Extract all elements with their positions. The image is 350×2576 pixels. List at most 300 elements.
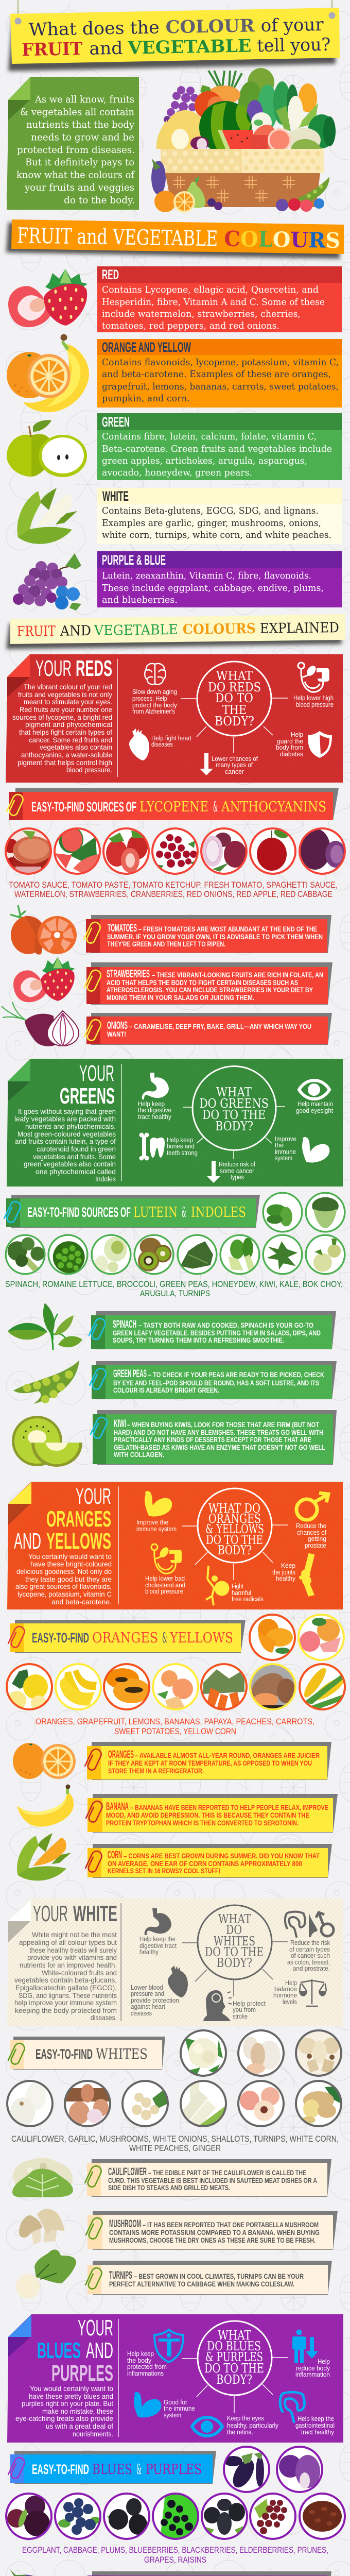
panel: red: include watermelon, strawberries, cherries, bbox=[102, 309, 301, 319]
caption: lower blood pressure: blood pressure bbox=[296, 701, 334, 708]
banner: sources of lycopene and anthocyanins: LYCOPENE bbox=[139, 799, 208, 815]
caption: gastrointestinal: Help keep the bbox=[297, 2415, 334, 2422]
panel: purple and blue: These include eggplant, cabbage, endive, plums, bbox=[102, 583, 324, 594]
circle: what do blues and purples do to the body: BODY? bbox=[216, 2372, 252, 2387]
banner: easy to find blues and purples: BLUES bbox=[92, 2462, 132, 2478]
text: blues description: have these pretty blues and bbox=[29, 2392, 113, 2400]
text: greens description: leafy vegetables are packed with bbox=[14, 1115, 116, 1123]
photo: cranberries bbox=[152, 828, 198, 874]
caption: blood pressure and heart: pressure and bbox=[131, 1990, 164, 1997]
circle: what do whites do to the body: BODY? bbox=[217, 1956, 252, 1970]
circle: what do oranges and yellows do to the body: ORANGES bbox=[208, 1512, 261, 1526]
icon: stomach bbox=[142, 1073, 169, 1099]
panel: intro note: protected from diseases. bbox=[17, 144, 135, 156]
caption: eyesight: good eyesight bbox=[296, 1107, 333, 1114]
text: whites description: help improve your immune system bbox=[14, 1998, 117, 2007]
caption: cancer risk: Reduce risk of bbox=[219, 1160, 255, 1168]
caption: lower blood pressure: Help lower high bbox=[293, 694, 334, 702]
caption: cholesterol bbox=[145, 1574, 185, 1595]
photo: spinach bbox=[263, 1193, 302, 1232]
caption: bones and teeth: bones and bbox=[167, 1142, 195, 1150]
note: mushroom bbox=[85, 2211, 338, 2250]
caption: stroke bbox=[233, 1999, 266, 2020]
banner: colours explained: FRUIT bbox=[17, 623, 56, 640]
note: strawberries: ACID THAT HELPS THE BODY TO FIGHT CERTAIN DISEASES SUCH AS bbox=[107, 978, 298, 987]
banner: sources of lutein and indoles: EASY-TO-FIND SOURCES OF bbox=[27, 1205, 131, 1220]
icon: kiwi bbox=[12, 1416, 82, 1467]
text: oranges description bbox=[15, 1552, 112, 1606]
caption: prostate: chances of bbox=[297, 1529, 326, 1536]
text: greens description: nutrients and phytochemicals. bbox=[25, 1122, 116, 1130]
caption: stroke: stroke bbox=[233, 2012, 248, 2020]
panel: intro note: know what the colours of bbox=[16, 170, 135, 181]
photo: cauliflower bbox=[181, 2030, 226, 2076]
banner: colours explained bbox=[6, 614, 345, 649]
caption: hormones: hormone bbox=[273, 1991, 297, 1999]
heading: your oranges and yellows: YOUR bbox=[76, 1484, 111, 1509]
text: reds description: pigment and phytochemical bbox=[25, 720, 112, 728]
text: reds description bbox=[12, 683, 112, 774]
caption: digestive: Help keep the bbox=[139, 1935, 176, 1943]
text: whites description: appealing of all colour types but bbox=[19, 1938, 117, 1946]
caption: slow down aging bbox=[132, 688, 177, 715]
caption: heart diseases: Help fight heart bbox=[151, 734, 191, 742]
heading: your oranges and yellows: AND bbox=[14, 1529, 41, 1554]
panel: orange and yellow: ORANGE AND YELLOW bbox=[102, 340, 191, 355]
photo: turnips bbox=[122, 2081, 168, 2126]
photo: lemons bbox=[7, 1664, 52, 1711]
caption: bones and teeth: Help keep bbox=[167, 1136, 193, 1144]
circle: what do greens do to the body: DO GREENS bbox=[199, 1096, 269, 1111]
photo: blueberries bbox=[55, 2494, 100, 2539]
photo: blackberries bbox=[104, 2494, 149, 2539]
circle: what do whites do to the body: WHAT bbox=[218, 1912, 251, 1926]
circle: what do blues and purples do to the body: & PURPLES bbox=[205, 2350, 263, 2364]
banner: fruit and vegetable colours: COLOURS bbox=[224, 226, 341, 253]
note: turnips: TURNIPS bbox=[109, 2269, 132, 2281]
caption: immune: immune system bbox=[136, 1525, 177, 1533]
text: reds description: pigment that helps control high bbox=[18, 758, 112, 767]
photo: mushrooms bbox=[296, 2030, 341, 2076]
caption: inflammations: the body bbox=[127, 2357, 151, 2364]
banner: colours explained: AND bbox=[60, 623, 91, 639]
banner: fruit and vegetable colours bbox=[6, 219, 344, 259]
note: banana: BANANA bbox=[106, 1801, 129, 1812]
banner: easy to find blues and purples: EASY-TO-FIND bbox=[32, 2462, 89, 2477]
caption: free radicals bbox=[232, 1582, 264, 1603]
caption: cholesterol: Help lower bad bbox=[145, 1574, 185, 1582]
icon: eye bbox=[192, 2417, 222, 2436]
heading: your oranges and yellows bbox=[14, 1484, 111, 1554]
caption: heart diseases: diseases bbox=[151, 740, 173, 748]
note: strawberries: MIXING THEM IN YOUR SALADS OR JUICING THEM. bbox=[107, 993, 254, 1002]
note: spinach: SOUPS, TRY TURNING THEM INTO A REFRESHING SMOOTHIE. bbox=[113, 1336, 284, 1344]
text: blues description: us with a great deal of bbox=[46, 2422, 113, 2430]
note: tomatoes bbox=[83, 915, 331, 953]
photo: strawberries bbox=[103, 828, 149, 874]
title banner: and bbox=[89, 38, 123, 59]
note: tomatoes: THEY'RE GREEN AND THEN LEFT TO RIPEN. bbox=[107, 940, 225, 948]
panel: intro note: But it definitely pays to bbox=[25, 157, 134, 168]
panel: orange and yellow: grapefruit, lemons, bananas, carrots, sweet potatoes, bbox=[102, 381, 339, 392]
text: reds description: meant to stimulate your eyes. bbox=[24, 698, 112, 706]
note: turnips: PERFECT ALTERNATIVE TO CABBAGE WHEN MAKING COLESLAW. bbox=[109, 2280, 294, 2288]
circle: what do reds do to the body bbox=[181, 662, 288, 753]
caption: eyesight: Help maintain bbox=[297, 1100, 333, 1108]
panel: intro note: nutrients that the body bbox=[26, 119, 134, 130]
panel: purple and blue: and blueberries. bbox=[102, 595, 178, 605]
text: oranges description: delicious goodness. Not only do bbox=[16, 1567, 112, 1575]
caption: reduce cancer risk bbox=[287, 1939, 330, 1972]
icon: pea pod bbox=[13, 1360, 79, 1404]
note: kiwi bbox=[90, 1410, 337, 1465]
caption: guard from diabetes: diabetes bbox=[280, 750, 303, 758]
note: onions: ONIONS bbox=[107, 1020, 128, 1031]
text: reds description: blood pressure. bbox=[66, 766, 112, 774]
banner: colours explained: EXPLAINED bbox=[260, 620, 339, 637]
banner: fruit and vegetable colours: FRUIT and VEGETABLE bbox=[17, 223, 218, 251]
caption: free radicals: Fight bbox=[232, 1582, 243, 1590]
icon: strawberries small bbox=[13, 957, 75, 1002]
list: orange sources bbox=[36, 1717, 314, 1736]
title banner: VEGETABLE bbox=[127, 36, 252, 59]
circle: what do reds do to the body: THE bbox=[222, 703, 247, 717]
circle: what do greens do to the body: DO TO THE bbox=[202, 1108, 266, 1122]
caption: gastrointestinal bbox=[295, 2415, 335, 2436]
caption: immune system: Improve bbox=[275, 1135, 296, 1143]
note: spinach: – TASTY BOTH RAW AND COOKED, SPINACH IS YOUR GO-TO bbox=[138, 1321, 313, 1329]
icon: eye bbox=[299, 1080, 329, 1099]
text: oranges description: lycopene, potassium, vitamin C bbox=[18, 1590, 112, 1598]
caption: gastrointestinal: gastrointestinal bbox=[295, 2421, 335, 2429]
caption: cholesterol: cholesterol and bbox=[145, 1581, 185, 1589]
caption: lower cancer: many types of bbox=[216, 761, 253, 769]
icon: blood pressure bbox=[151, 1544, 182, 1573]
caption: slow down aging: Slow down aging bbox=[132, 688, 177, 696]
panel: intro note bbox=[7, 77, 139, 210]
text: whites description: White-coloured fruits and bbox=[42, 1969, 117, 1977]
panel: intro note: & vegetables all contain bbox=[20, 106, 134, 117]
caption: body inflammation bbox=[295, 2358, 330, 2378]
note: spinach: SPINACH bbox=[113, 1318, 136, 1330]
caption: inflammations: inflammations bbox=[127, 2369, 164, 2377]
caption: immune system: the bbox=[275, 1141, 284, 1149]
circle: what do whites do to the body: DO TO THE bbox=[205, 1945, 264, 1959]
caption: cancer risk: some cancer bbox=[220, 1167, 255, 1175]
text: blues description: make no mistake, these bbox=[42, 2407, 113, 2415]
heading: your greens bbox=[60, 1061, 115, 1109]
list: blue and purple sources bbox=[22, 2546, 328, 2565]
photo: white peaches bbox=[238, 2081, 284, 2126]
caption: digestive: healthy bbox=[139, 1948, 159, 1956]
banner: easy to find blues and purples: & bbox=[136, 2462, 142, 2478]
panel: your blues and purples bbox=[7, 2314, 343, 2443]
text: whites description: provide you with vitamins and bbox=[27, 1953, 117, 1961]
caption: reduce cancer risk: of cancer such bbox=[291, 1952, 330, 1959]
text: greens description bbox=[14, 1107, 116, 1183]
text: reds description: that helps fight certain types of bbox=[19, 728, 112, 736]
caption: lower cancer: cancer bbox=[225, 768, 244, 775]
note: onions bbox=[84, 1013, 332, 1045]
caption: blood pressure and heart: provide protection bbox=[131, 1996, 179, 2004]
panel: your white bbox=[7, 1899, 343, 2026]
text: blues description: eye-catching treats also provide bbox=[15, 2414, 113, 2422]
list: red sources bbox=[9, 880, 338, 899]
heading: your greens: GREENS bbox=[60, 1083, 115, 1109]
banner: sources of lycopene and anthocyanins bbox=[6, 788, 339, 820]
circle: what do greens do to the body bbox=[183, 1066, 285, 1159]
icon: green apple bbox=[7, 420, 87, 477]
heading: your white: YOUR bbox=[33, 1901, 68, 1926]
panel: red bbox=[97, 266, 342, 332]
icon: white corn bbox=[17, 488, 77, 544]
text: reds description: fruits and vegetables is not only bbox=[18, 690, 112, 699]
icon: banana bbox=[17, 1785, 74, 1827]
banner: easy to find whites: WHITES bbox=[96, 2046, 148, 2062]
list: blue and purple sources: GRAPES, RAISINS bbox=[144, 2555, 206, 2565]
caption: eyesight bbox=[296, 1100, 333, 1114]
title banner: of your bbox=[260, 14, 324, 36]
circle: what do reds do to the body: WHAT bbox=[216, 669, 253, 683]
panel: intro note: do to the body. bbox=[64, 195, 135, 206]
note: corn bbox=[85, 1844, 332, 1878]
photo: red apple bbox=[250, 827, 295, 874]
caption: slow down aging: from Alzheimer's bbox=[132, 707, 175, 715]
photo: white onions bbox=[7, 2081, 52, 2126]
icon: scale bbox=[299, 1979, 326, 2006]
icon: male symbol bbox=[296, 1493, 328, 1520]
caption: digestive tract: tract healthy bbox=[138, 1113, 171, 1121]
note: kiwi: KIWI bbox=[114, 1418, 126, 1430]
icon: colon, breast and male symbols bbox=[285, 1912, 334, 1938]
icon: orange and banana bbox=[7, 334, 89, 412]
icon: head with brain bbox=[203, 1990, 232, 2021]
photo: garlic bbox=[238, 2030, 284, 2076]
caption: hormones: Help bbox=[285, 1979, 297, 1987]
photo: sweet potatoes bbox=[247, 1664, 295, 1710]
photo: honeydew bbox=[92, 1235, 131, 1274]
icon: eggplant bbox=[10, 2569, 74, 2576]
banner: easy to find whites: EASY-TO-FIND bbox=[36, 2046, 93, 2062]
caption: prostate: getting bbox=[308, 1535, 326, 1543]
text: blues description bbox=[15, 2384, 113, 2438]
text: oranges description: You certainly would want to bbox=[28, 1552, 112, 1561]
panel: green: avocado, honeydew, green pears. bbox=[102, 467, 252, 478]
text: blues description: nourishments. bbox=[73, 2430, 113, 2438]
photo: peaches bbox=[153, 1664, 198, 1709]
text: whites description: vegetables contain beta-glucans, bbox=[14, 1976, 117, 1984]
text: greens description: and fruits contain lutein, a type of bbox=[15, 1137, 116, 1145]
caption: slow down aging: process; Help bbox=[132, 694, 167, 702]
panel: white bbox=[97, 488, 342, 544]
panel: your reds bbox=[6, 654, 343, 783]
heading: your blues and purples: YOUR bbox=[78, 2315, 113, 2341]
caption: immune system: immune bbox=[275, 1148, 296, 1156]
panel: orange and yellow: and beta-carotene. Examples of these are oranges, bbox=[102, 369, 331, 380]
heading: your blues and purples: AND bbox=[86, 2338, 113, 2363]
circle: what do blues and purples do to the body: DO BLUES bbox=[207, 2339, 261, 2353]
banner: sources of lutein and indoles: INDOLES bbox=[191, 1205, 246, 1221]
panel: purple and blue: PURPLE & BLUE bbox=[102, 552, 166, 568]
caption: prostate: prostate bbox=[305, 1541, 326, 1549]
panel: orange and yellow: Contains flavonoids, lycopene, potassium, vitamin C, bbox=[102, 357, 339, 368]
photo: romaine lettuce bbox=[306, 1193, 345, 1232]
circle: what do oranges and yellows do to the body: BODY? bbox=[218, 1543, 252, 1557]
caption: immune system bbox=[164, 2398, 195, 2419]
banner: sources of lycopene and anthocyanins: ANTHOCYANINS bbox=[221, 799, 326, 815]
panel: green: Beta-carotene. Green fruits and vegetables include bbox=[102, 444, 332, 454]
caption: blood pressure and heart bbox=[131, 1984, 179, 2017]
hanging strings and pins bbox=[18, 0, 332, 20]
caption: slow down aging: protect the body bbox=[132, 701, 177, 709]
panel: white: white corn, turnips, white corn, and white peaches. bbox=[102, 530, 331, 540]
text: whites description: nutrients for an improved health. bbox=[20, 1961, 117, 1969]
icon: down arrow bbox=[207, 1161, 220, 1183]
banner: easy to find oranges and yellows: EASY-TO-FIND bbox=[32, 1630, 89, 1646]
caption: prostate bbox=[296, 1522, 326, 1549]
icon: bone and tooth bbox=[139, 1132, 165, 1160]
photo: watermelon bbox=[55, 826, 100, 874]
banner: sources of lutein and indoles bbox=[4, 1195, 260, 1228]
heading: your reds: YOUR bbox=[36, 656, 72, 681]
icon: muscle bbox=[145, 1491, 172, 1517]
photo: papaya bbox=[104, 1664, 150, 1709]
panel: orange and yellow bbox=[97, 339, 342, 408]
caption: blood pressure and heart: against heart bbox=[131, 2003, 165, 2010]
heading: your oranges and yellows: YELLOWS bbox=[46, 1529, 111, 1554]
banner: sources of lutein and indoles: & bbox=[182, 1205, 186, 1221]
circle: what do greens do to the body: BODY? bbox=[215, 1119, 253, 1133]
text: greens description: carotenoid found in green bbox=[37, 1145, 116, 1153]
caption: digestive bbox=[139, 1935, 177, 1956]
icon: cauliflower bbox=[12, 2158, 73, 2197]
panel: green: Contains fibre, lutein, calcium, folate, vitamin C, bbox=[102, 431, 317, 442]
icon: down arrow bbox=[200, 753, 213, 775]
text: blues description: You would certainly want to bbox=[30, 2384, 113, 2393]
caption: heart diseases bbox=[151, 734, 191, 748]
panel: green: GREEN bbox=[102, 414, 130, 430]
icon: shield figure bbox=[206, 1566, 230, 1605]
heading: your blues and purples: BLUES bbox=[37, 2338, 81, 2363]
text: reds description: The vibrant colour of your red bbox=[24, 683, 112, 691]
caption: inflammations: protected from bbox=[127, 2363, 167, 2370]
circle: what do blues and purples do to the body bbox=[182, 2321, 288, 2413]
caption: hormones: levels bbox=[283, 1998, 297, 2006]
note: banana: PROTEIN TRYPTOPHAN WHICH IS THEN CONVERTED TO SEROTONIN. bbox=[106, 1819, 299, 1827]
caption: lower blood pressure bbox=[293, 694, 334, 708]
text: oranges description: also great sources of flavonoids, bbox=[15, 1582, 112, 1590]
caption: immune system: Good for bbox=[164, 2398, 188, 2406]
photo: shallots bbox=[65, 2081, 110, 2126]
note: corn: ON AVERAGE, ONE EAR OF CORN CONTAINS APPROXIMATELY 800 bbox=[108, 1859, 302, 1868]
caption: joints: the joints bbox=[272, 1568, 295, 1576]
caption: guard from diabetes: body from bbox=[276, 743, 303, 751]
banner: easy to find blues and purples: PURPLES bbox=[146, 2462, 202, 2478]
icon: stomach bbox=[145, 1908, 171, 1935]
caption: body inflammation: inflammation bbox=[295, 2370, 330, 2378]
circle: what do whites do to the body: DO bbox=[226, 1923, 242, 1937]
caption: body inflammation: Help bbox=[318, 2358, 330, 2365]
note: cauliflower: SIDE DISH TO STEAKS AND GRILLED MEATS. bbox=[108, 2183, 230, 2192]
text: greens description: vegetables and fruits. Some bbox=[33, 1153, 116, 1161]
heading: your greens: YOUR bbox=[79, 1061, 114, 1086]
text: oranges description: have these bright-coloured bbox=[30, 1560, 112, 1568]
icon: joint bbox=[299, 1554, 313, 1596]
heading: your blues and purples: PURPLES bbox=[51, 2361, 113, 2386]
caption: inflammations: Help keep bbox=[127, 2350, 154, 2358]
list: white sources bbox=[11, 2134, 339, 2153]
panel: red: tomatoes, red peppers, and red onions. bbox=[102, 320, 279, 331]
note: corn: CORN bbox=[108, 1849, 122, 1861]
note: cauliflower: CAULIFLOWER bbox=[108, 2166, 147, 2178]
note: strawberries: STRAWBERRIES bbox=[107, 968, 150, 980]
icon: blood pressure bbox=[298, 663, 329, 692]
list: orange sources: ORANGES, GRAPEFRUIT, LEMONS, BANANAS, PAPAYA, PEACHES, CARROTS, bbox=[36, 1717, 314, 1726]
panel: white: WHITE bbox=[102, 488, 129, 504]
note: tomatoes: TOMATOES bbox=[108, 922, 137, 934]
text: whites description: White might not be the most bbox=[32, 1930, 117, 1939]
caption: bones and teeth: teeth strong bbox=[167, 1149, 198, 1157]
illustration: basket of fruit and vegetables bbox=[151, 68, 336, 213]
banner: easy to find blues and purples bbox=[8, 2451, 216, 2484]
caption: body inflammation: reduce body bbox=[296, 2364, 330, 2372]
icon: muscle bbox=[134, 2392, 161, 2417]
icon: red onion bbox=[2, 1002, 79, 1046]
text: whites description bbox=[14, 1930, 117, 2022]
caption: hormones: balance bbox=[274, 1985, 297, 1993]
icon: tomato bbox=[10, 905, 77, 955]
banner: easy to find oranges and yellows: YELLOWS bbox=[169, 1630, 233, 1646]
panel: your greens bbox=[7, 1059, 343, 1187]
caption: immune system bbox=[275, 1135, 296, 1162]
banner: easy to find oranges and yellows: ORANGES bbox=[92, 1630, 158, 1646]
caption: retina: the retina. bbox=[227, 2428, 253, 2436]
photo: arugula bbox=[263, 1235, 302, 1274]
banner: sources of lycopene and anthocyanins: & bbox=[213, 799, 218, 815]
photo: eggplants bbox=[224, 2447, 269, 2492]
photo: oranges bbox=[250, 1615, 295, 1660]
circle: what do whites do to the body: WHITES bbox=[214, 1934, 255, 1948]
text: oranges description: they taste good but they are bbox=[25, 1575, 112, 1583]
caption: free radicals: free radicals bbox=[232, 1595, 264, 1603]
text: whites description: these healthy treats will surely bbox=[29, 1946, 117, 1954]
note: kiwi: WITH COLLAGEN. bbox=[114, 1450, 164, 1459]
text: whites description: Epigallocatechin gallate (EGCG), bbox=[15, 1984, 117, 1992]
photo: green peas bbox=[48, 1235, 87, 1274]
photo: white corn bbox=[181, 2081, 226, 2130]
caption: hormones bbox=[273, 1979, 297, 2006]
panel: green: green apples, artichokes, arugula, asparagus, bbox=[102, 455, 307, 466]
photo: red cabbage bbox=[300, 828, 346, 874]
circle: what do blues and purples do to the body: DO TO THE bbox=[204, 2361, 264, 2376]
banner: colours explained: COLOURS bbox=[183, 621, 256, 638]
icon: person and arrow bbox=[292, 2330, 318, 2363]
caption: bones and teeth bbox=[167, 1136, 198, 1157]
title banner bbox=[8, 8, 340, 71]
note: strawberries bbox=[84, 962, 332, 1005]
photo: elderberries bbox=[153, 2494, 198, 2539]
caption: guard from diabetes: guard the bbox=[277, 737, 303, 745]
caption: lower cancer: Lower chances of bbox=[212, 755, 258, 762]
caption: immune system: system bbox=[164, 2411, 181, 2419]
text: blues description: purples right on your plate. But bbox=[22, 2399, 113, 2408]
photo: carrots bbox=[201, 1664, 247, 1709]
panel: orange and yellow: pumpkin, and corn. bbox=[102, 393, 190, 404]
photo: grapefruit bbox=[299, 1615, 344, 1660]
circle: what do oranges and yellows do to the body: WHAT DO bbox=[208, 1501, 260, 1516]
text: greens description: Most green-coloured vegetables bbox=[18, 1130, 116, 1138]
banner: sources of lycopene and anthocyanins: EASY-TO-FIND SOURCES OF bbox=[31, 799, 136, 815]
